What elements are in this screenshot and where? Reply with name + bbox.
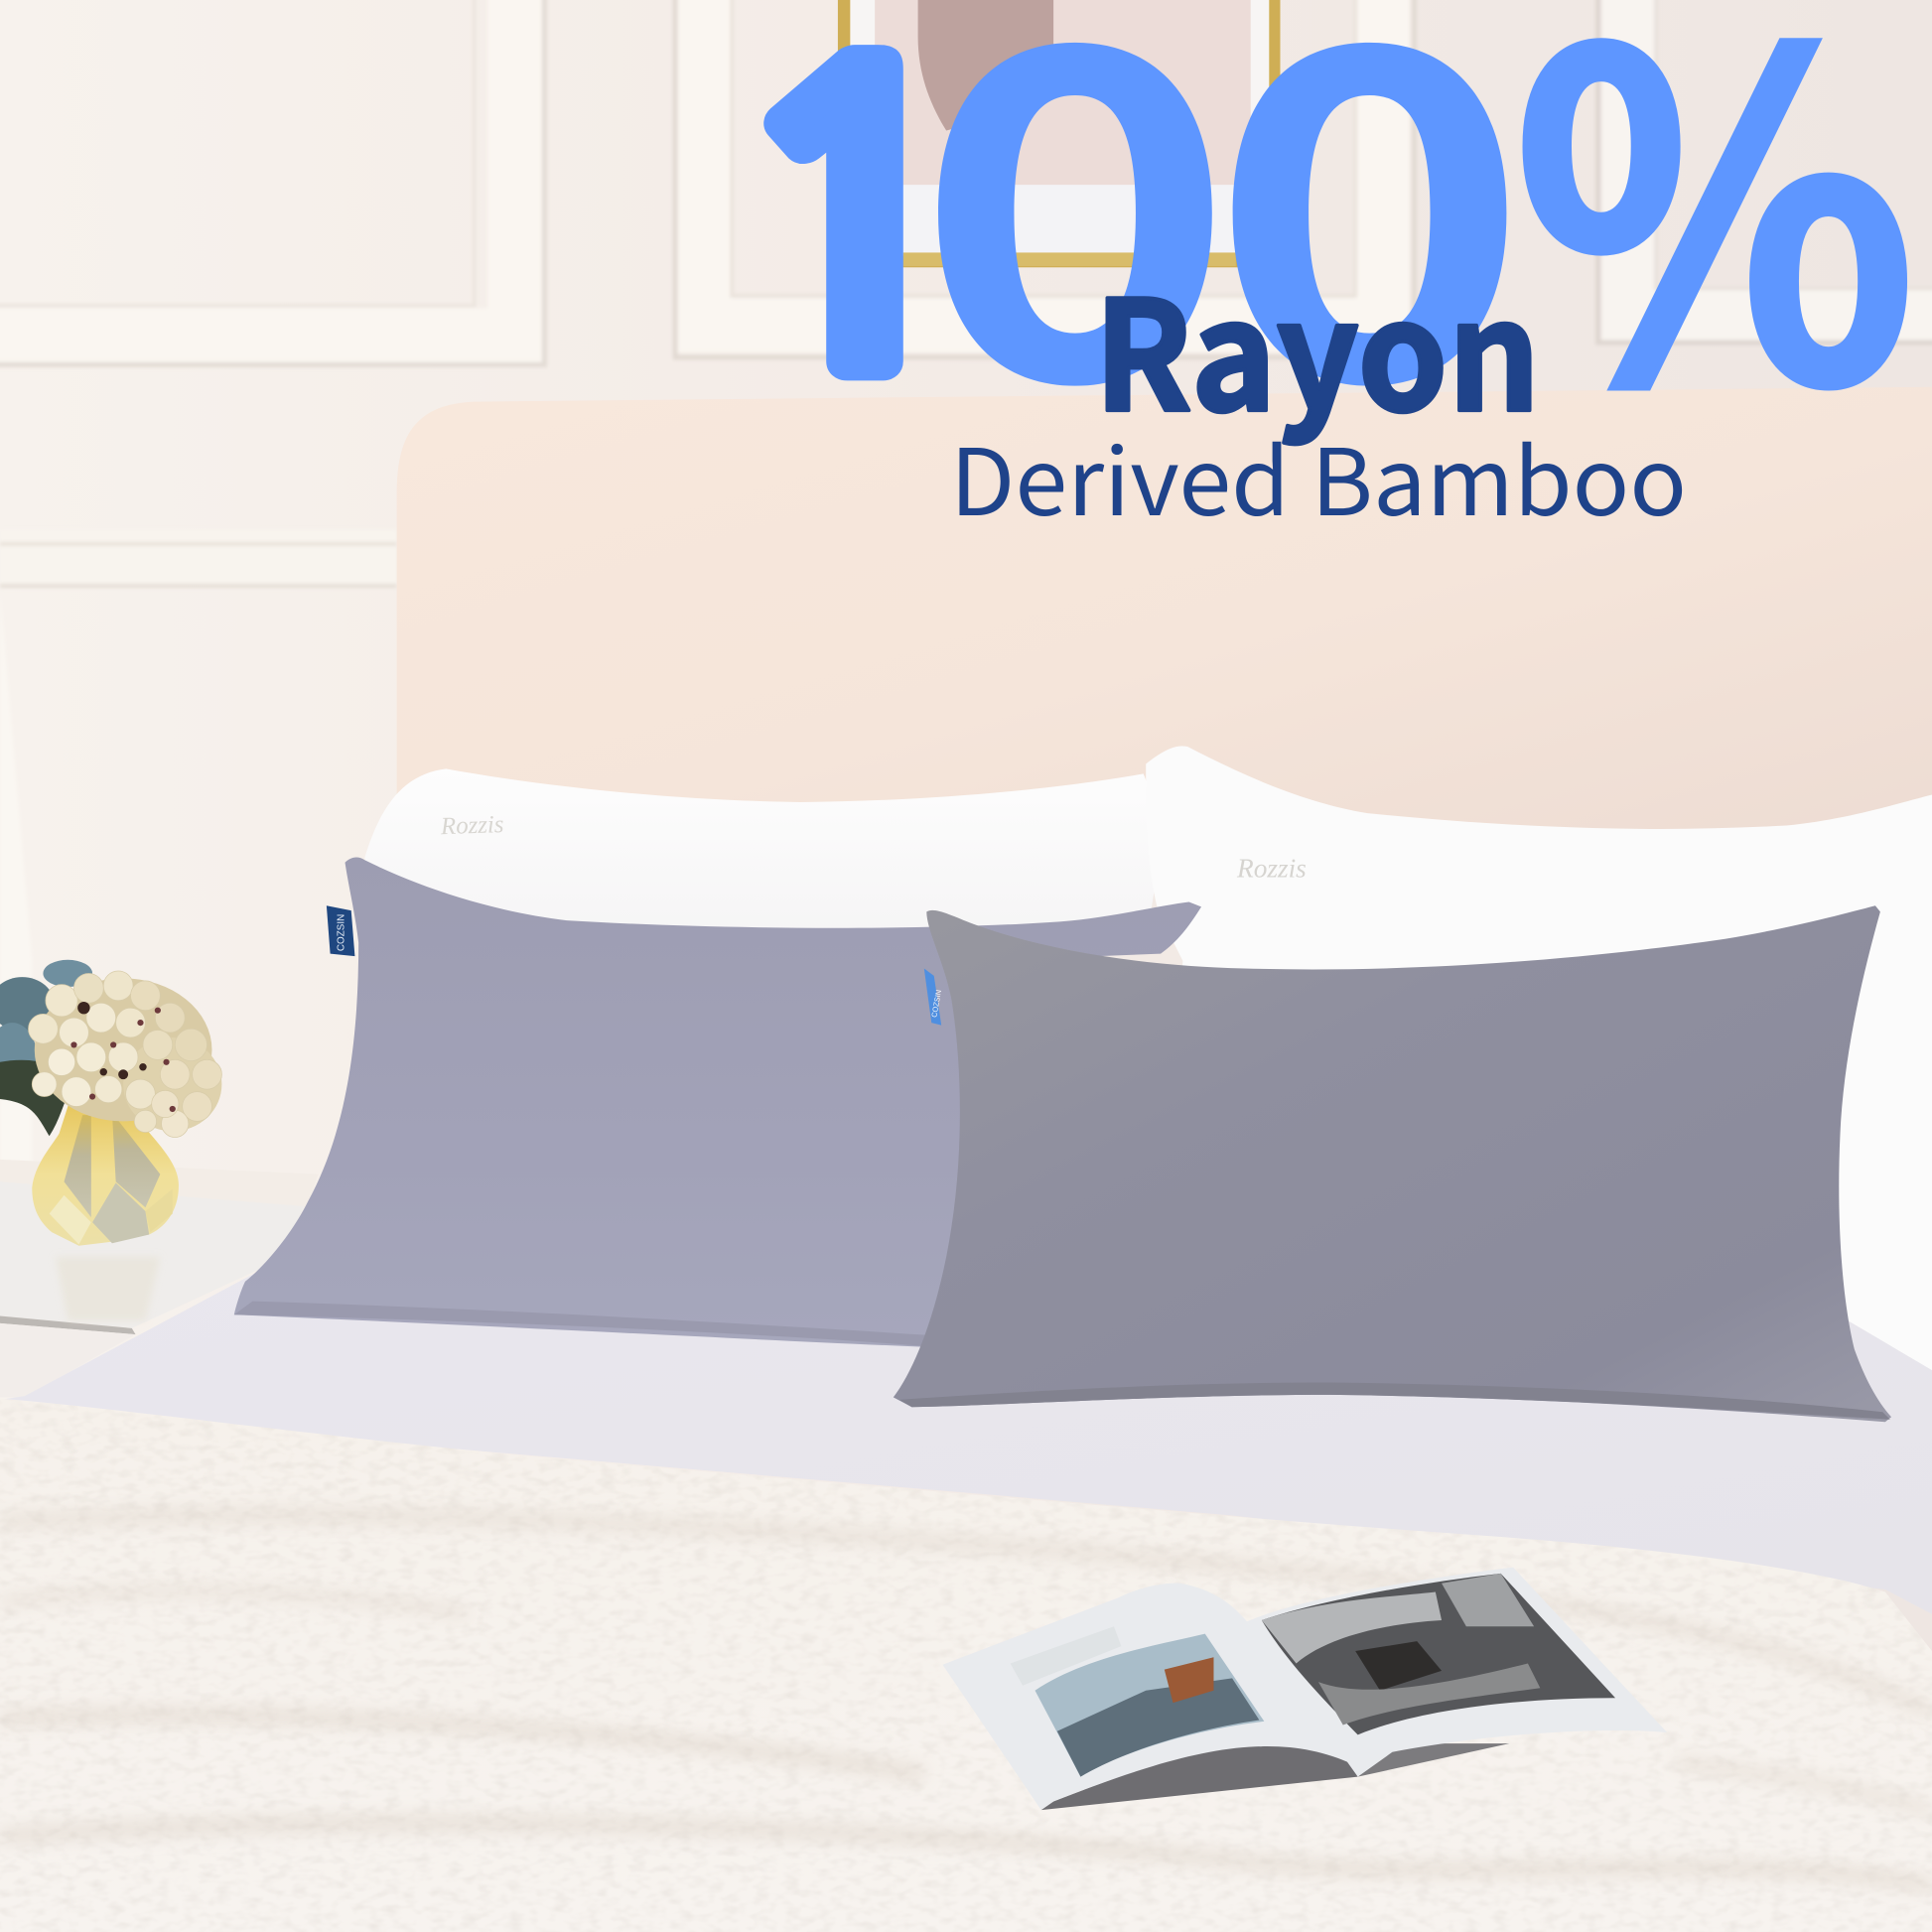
book pages block bbox=[1041, 1736, 1358, 1810]
headboard bbox=[397, 387, 1932, 838]
digit 1: 1 bbox=[723, 26, 987, 427]
white pillow right bbox=[1146, 746, 1932, 1370]
fabric tag bbox=[924, 968, 943, 1026]
right moulding panel bbox=[1598, 0, 1932, 343]
left page small photo bbox=[1011, 1626, 1121, 1686]
grey pillow front bbox=[894, 905, 1891, 1422]
headline: 100% bbox=[723, 0, 1918, 512]
left page main photo bbox=[1035, 1634, 1264, 1777]
sub-heading: Derived Bamboo: Derived Bamboo bbox=[950, 408, 1687, 542]
pillow embroidery: Rozzis bbox=[1236, 854, 1307, 884]
flowers and vase bbox=[0, 960, 221, 1320]
right page bbox=[1247, 1568, 1667, 1777]
fabric tag: COZSIN bbox=[336, 914, 346, 951]
sub-heading: Rayon: Rayon bbox=[1094, 234, 1540, 454]
left page bbox=[942, 1584, 1353, 1810]
white pillow left bbox=[364, 768, 1158, 973]
blue-green leaves bbox=[0, 960, 92, 1136]
left lower moulding band bbox=[0, 530, 397, 1165]
pillow embroidery: Rozzis bbox=[440, 811, 504, 840]
blanket folds bbox=[0, 1516, 1932, 1885]
fitted sheet bbox=[0, 1261, 1932, 1614]
wall mouldings bbox=[0, 0, 1932, 1165]
nightstand with baseboard bbox=[0, 1160, 318, 1397]
right page photo bbox=[1262, 1574, 1615, 1734]
vase reflection bbox=[56, 1257, 160, 1320]
open magazine bbox=[942, 1568, 1667, 1810]
centre moulding panel bbox=[675, 0, 1415, 357]
left upper moulding panel bbox=[0, 0, 545, 364]
vase bbox=[32, 1103, 179, 1246]
knit blanket bbox=[0, 1392, 1932, 1932]
fabric tag: COZSIN bbox=[929, 989, 943, 1018]
grey pillow back bbox=[234, 858, 1201, 1348]
fabric tag bbox=[327, 905, 354, 956]
cream hydrangea bbox=[29, 971, 221, 1138]
framed picture bbox=[838, 0, 1280, 267]
